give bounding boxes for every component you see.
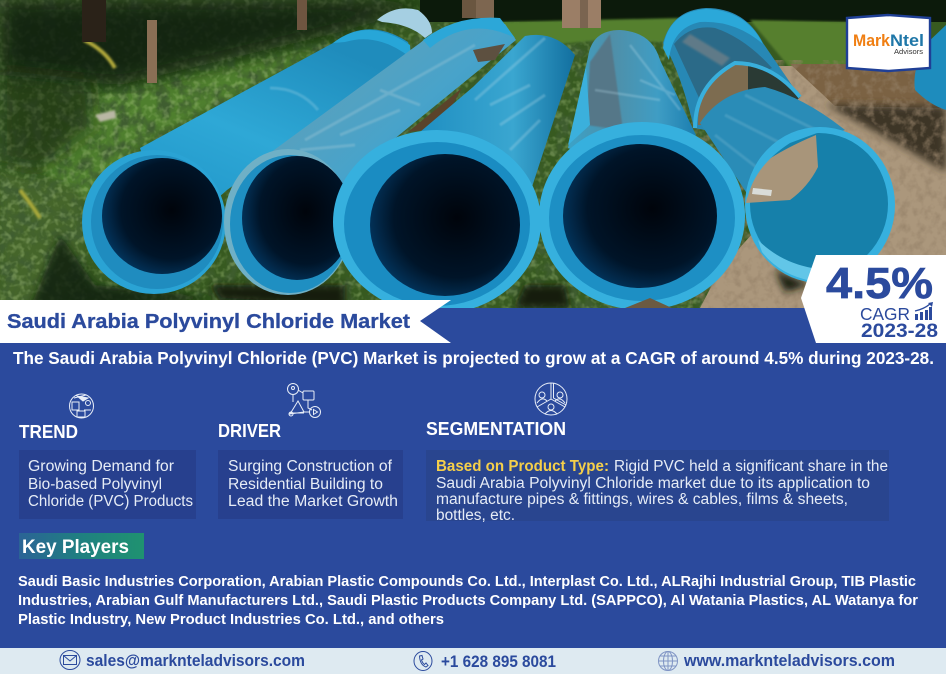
heading: driver: DRIVER bbox=[218, 421, 281, 441]
segmentation text box bbox=[426, 450, 889, 524]
pipe 2 bbox=[224, 18, 516, 295]
pipe far background elbow bbox=[377, 8, 432, 38]
driver text box: Lead the Market Growth bbox=[228, 493, 398, 510]
trend text box bbox=[19, 450, 196, 519]
pipe 5: back ring bbox=[663, 8, 800, 140]
trend text box: Growing Demand for bbox=[28, 458, 174, 475]
pipe 4 bbox=[539, 30, 745, 310]
pipe 1 bbox=[82, 29, 412, 294]
key players list: Industries, Arabian Gulf Manufacturers Ltd., Saudi Plastic Products Company Ltd. (SAPPCO), Al Watania Plastics, AL Watanya for bbox=[18, 593, 918, 609]
CAGR label: CAGR bbox=[860, 304, 910, 324]
heading: trend: TREND bbox=[19, 422, 78, 442]
panel: driver bbox=[218, 384, 403, 519]
driver text box: Surging Construction of bbox=[228, 458, 393, 475]
panel: blue content panel bbox=[0, 308, 946, 648]
segmentation text box: manufacture pipes & fittings, wires & cables, films & sheets, bbox=[436, 491, 848, 508]
driver text box: Residential Building to bbox=[228, 476, 383, 493]
icon: envelope bbox=[60, 650, 80, 670]
key players heading bbox=[19, 533, 144, 559]
icon: growth bars bbox=[915, 302, 933, 320]
forecast period: 2023-28 bbox=[861, 321, 938, 342]
footer: phone: +1 628 895 8081 bbox=[441, 653, 556, 671]
pipe 5 near opening bbox=[698, 64, 800, 125]
trend text box: Bio-based Polyvinyl bbox=[28, 476, 162, 493]
key players list bbox=[18, 574, 918, 628]
CAGR value: 4.5% bbox=[826, 259, 933, 308]
logo: MarkNtel Advisors: Mark bbox=[853, 32, 891, 50]
key players heading: Key Players bbox=[22, 537, 129, 558]
panel: segmentation bbox=[426, 383, 889, 524]
segmentation text box: Saudi Arabia Polyvinyl Chloride market due to its application to bbox=[436, 475, 870, 492]
CAGR badge bbox=[801, 255, 946, 343]
title banner: Saudi Arabia Polyvinyl Chloride Market bbox=[7, 310, 410, 333]
ground shadow under pipes bbox=[210, 270, 810, 308]
logo: MarkNtel Advisors: Advisors bbox=[894, 47, 923, 56]
dirt between pipes bbox=[408, 88, 462, 132]
summary headline: The Saudi Arabia Polyvinyl Chloride (PVC) Market is projected to grow at a CAGR of around 4.5% during 2023-28. bbox=[13, 348, 934, 368]
segmentation text box: Rigid PVC held a significant share in the bbox=[614, 458, 888, 475]
logo: MarkNtel Advisors bbox=[847, 15, 930, 71]
icon: driver network bbox=[288, 384, 320, 418]
logo: MarkNtel Advisors: Ntel bbox=[890, 32, 924, 50]
heading: segmentation: SEGMENTATION bbox=[426, 419, 566, 439]
icon: globe bbox=[658, 652, 678, 670]
far right pipe edge bbox=[914, 25, 946, 110]
key players list: Saudi Basic Industries Corporation, Arabian Plastic Compounds Co. Ltd., Interplast Co. Ltd., ALRajhi Industrial Group, TIB Plastic bbox=[18, 574, 916, 590]
icon: segmentation pie with people bbox=[535, 383, 567, 415]
driver text box bbox=[218, 450, 403, 519]
key players list: Plastic Industry, New Product Industries Co. Ltd., and others bbox=[18, 612, 444, 628]
pipe 3 bbox=[333, 35, 575, 314]
icon: phone bbox=[414, 652, 432, 670]
title banner bbox=[0, 300, 451, 343]
panel: trend bbox=[19, 394, 196, 519]
icon: trend globe bbox=[70, 394, 94, 418]
debris under pipes bbox=[625, 298, 672, 308]
footer: email: sales@marknteladvisors.com bbox=[86, 652, 305, 670]
segmentation text box: Based on Product Type: bbox=[436, 458, 609, 475]
pipe 6: right open pipe bbox=[700, 87, 895, 283]
segmentation text box: bottles, etc. bbox=[436, 507, 515, 524]
footer: website: www.marknteladvisors.com bbox=[683, 652, 895, 670]
tree trunks bbox=[82, 0, 601, 83]
photo background: foliage and ground bbox=[0, 0, 946, 308]
trend text box: Chloride (PVC) Products bbox=[28, 493, 193, 510]
footer bar bbox=[0, 648, 946, 674]
photo: blue PVC pipes bbox=[0, 0, 946, 314]
